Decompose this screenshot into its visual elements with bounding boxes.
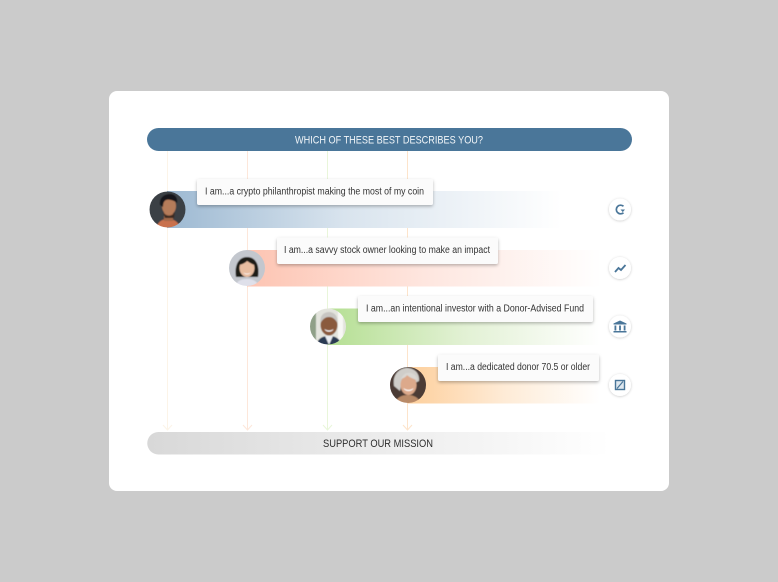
callout <box>438 354 599 381</box>
footer bar: support our mission <box>147 432 610 454</box>
avatar: older woman <box>390 367 426 403</box>
callout <box>358 296 593 322</box>
avatar: man <box>150 192 186 228</box>
gradient bar <box>328 308 600 345</box>
gradient bar <box>167 191 562 228</box>
icon: crypto coin <box>609 198 631 220</box>
line: second column <box>243 151 252 430</box>
icon: tax form <box>609 374 631 396</box>
row 2: stock owner <box>228 238 631 288</box>
callout <box>197 179 433 205</box>
line: first column <box>163 151 172 430</box>
row 4: dedicated donor <box>389 354 631 406</box>
panel: white card <box>109 91 669 491</box>
callout <box>277 238 498 264</box>
line: fourth column <box>403 151 412 430</box>
gradient bar <box>408 367 600 404</box>
heading bar: WHICH OF THESE BEST DESCRIBES YOU? <box>295 134 483 146</box>
footer bar: support our mission: SUPPORT OUR MISSION <box>323 438 433 450</box>
avatar: older man <box>310 308 346 344</box>
icon: bank <box>609 316 631 338</box>
row 2: stock owner: I am...a savvy stock owner looking to make an impact <box>284 245 490 256</box>
icon: trend line <box>609 257 631 279</box>
row 4: dedicated donor: I am...a dedicated donor 70.5 or older <box>446 362 591 373</box>
gradient bar <box>247 250 602 286</box>
heading bar <box>147 128 632 151</box>
flow lines with arrows <box>163 151 412 430</box>
row 3: donor-advised fund <box>309 296 631 347</box>
avatar: woman <box>229 250 265 286</box>
line: third column <box>323 151 332 430</box>
row 3: donor-advised fund: I am...an intentional investor with a Donor-Advised Fund <box>366 304 584 314</box>
row 1: crypto philanthropist: I am...a crypto philanthropist making the most of my coin <box>205 186 424 198</box>
row 1: crypto philanthropist <box>149 179 631 230</box>
